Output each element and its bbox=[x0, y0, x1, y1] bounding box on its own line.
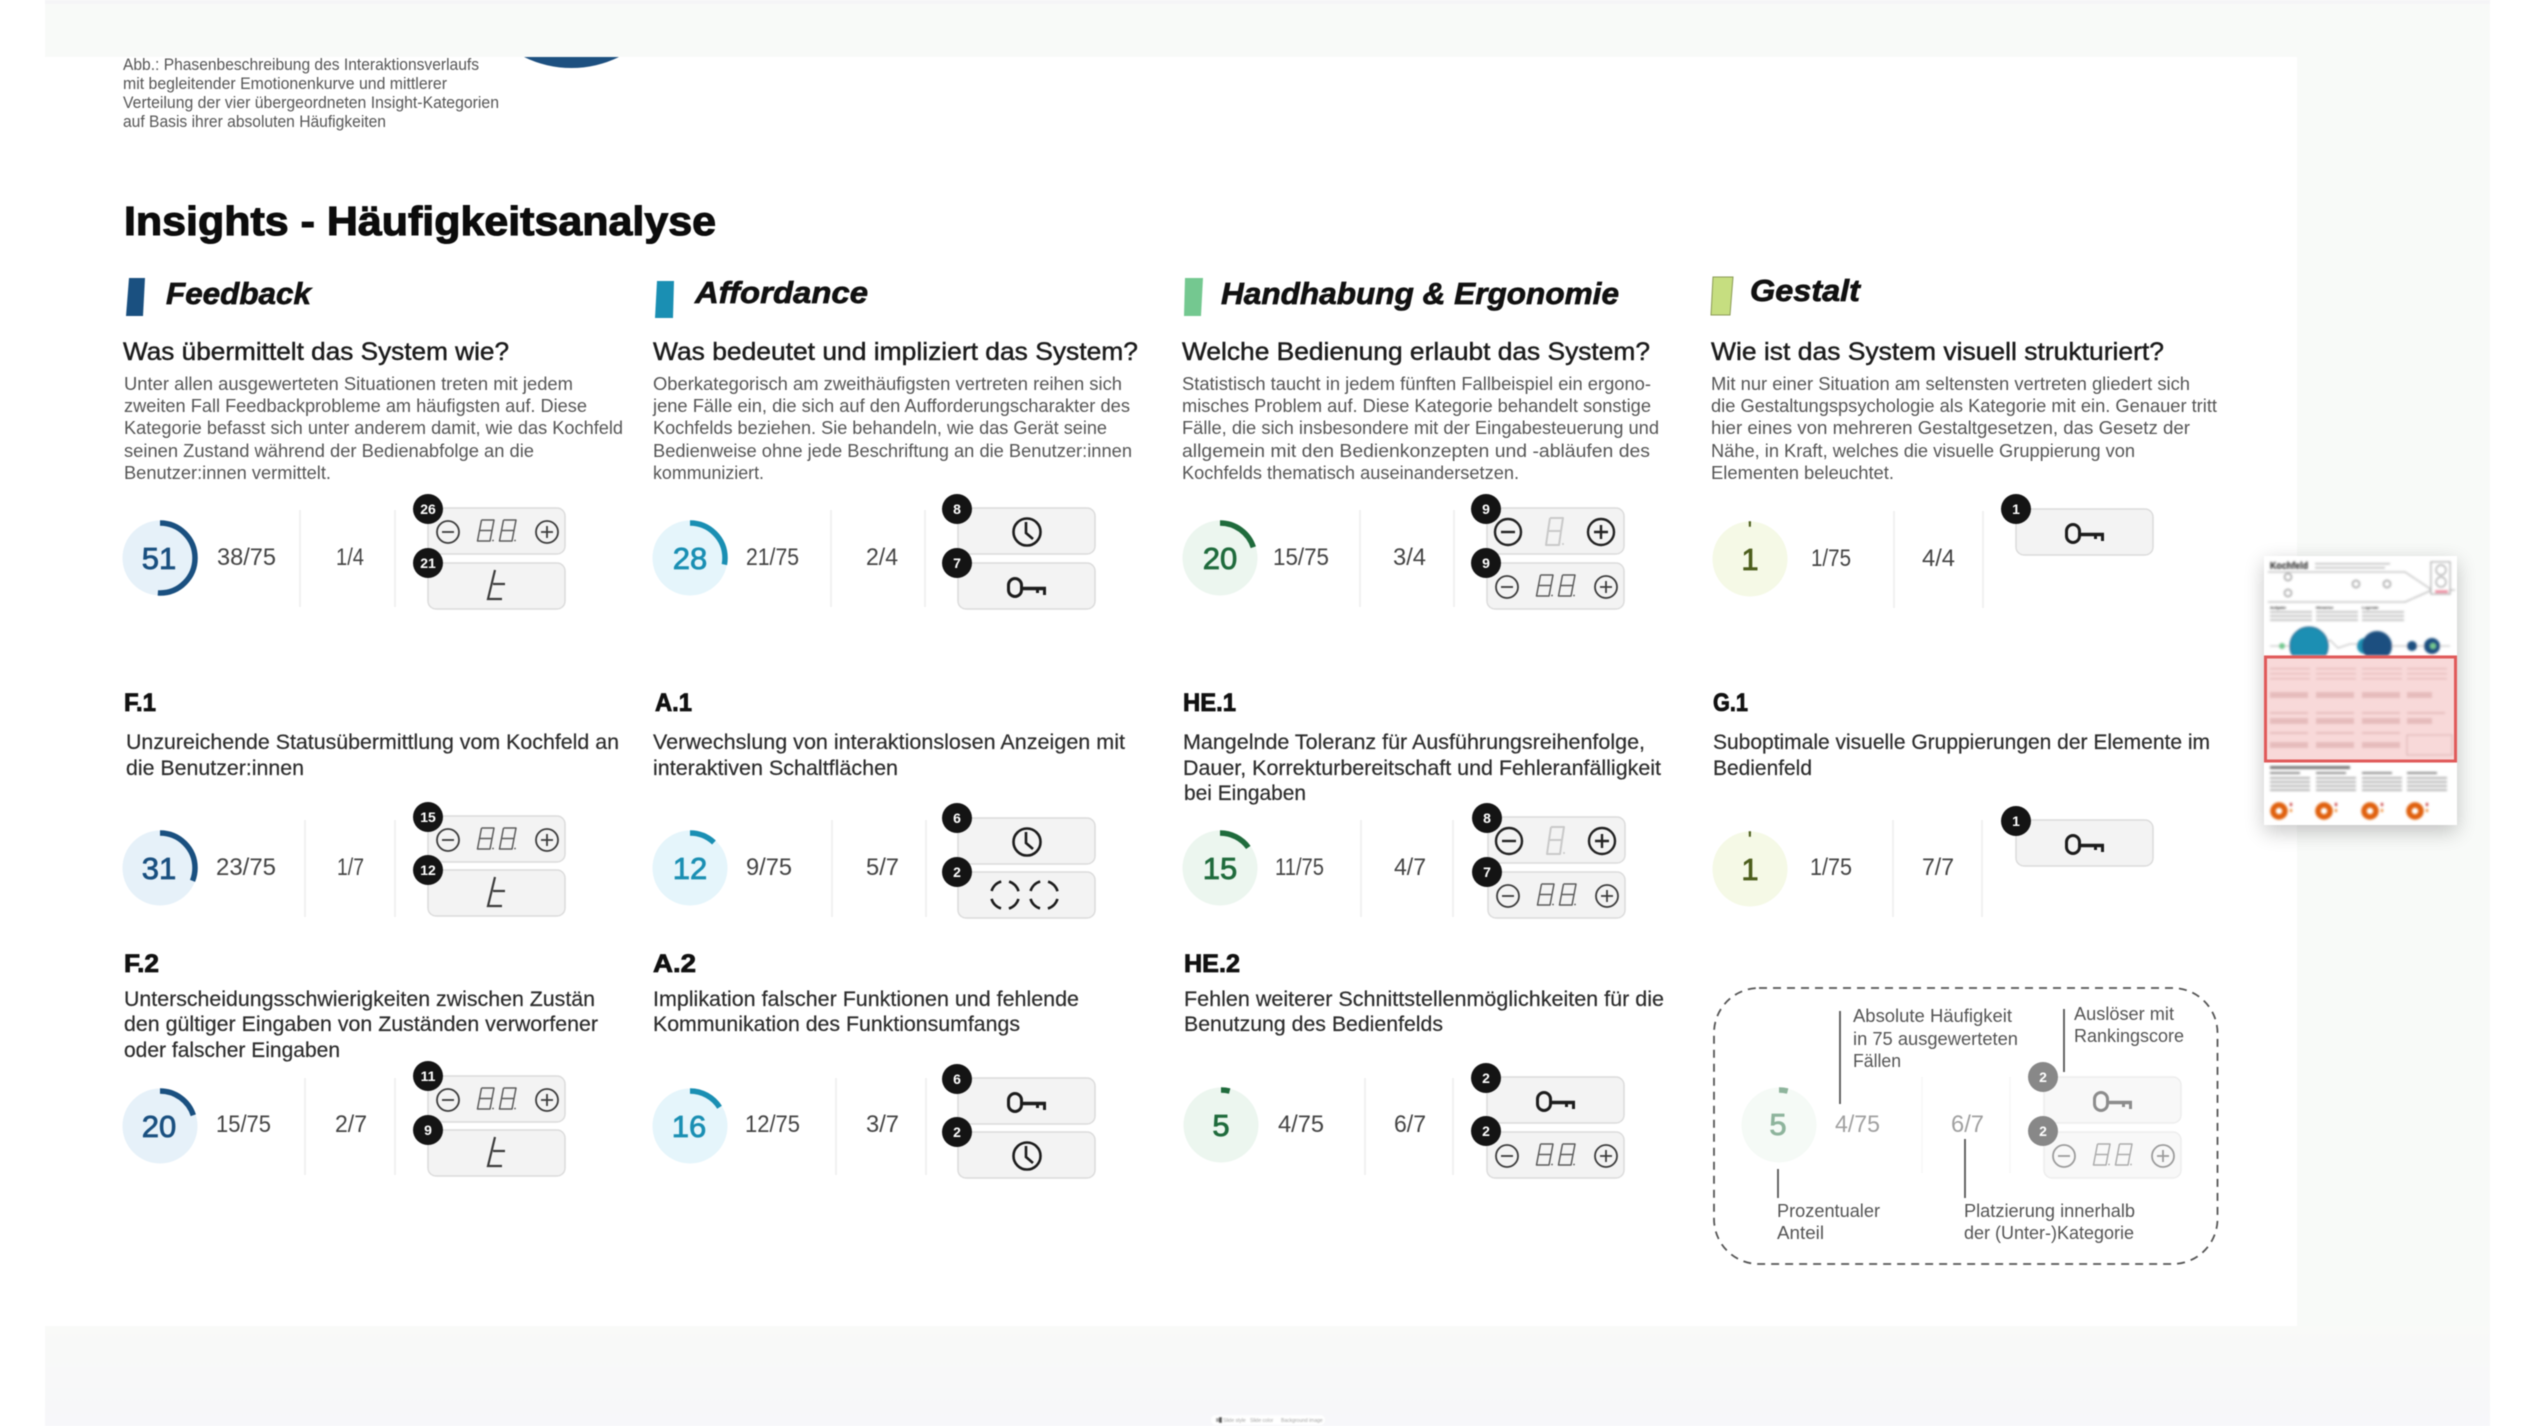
trigger: 1: 1 bbox=[2012, 813, 2020, 829]
count 1/75: 1/75 bbox=[1810, 854, 1852, 881]
figure caption: auf Basis ihrer absoluten Häufigkeiten bbox=[123, 113, 386, 131]
legend label: percentage bbox=[1777, 1200, 1880, 1243]
column: Affordance header bbox=[652, 275, 1138, 483]
text: Handhabung description: allgemein mit den Bedienkonzepten und -abläufen des bbox=[1182, 441, 1650, 461]
rank 6/7: 6/7 bbox=[1394, 1111, 1426, 1138]
text: Affordance description: kommuniziert. bbox=[653, 463, 764, 483]
poster thumbnail with highlighted region bbox=[2264, 556, 2457, 832]
count 15/75: 15/75 bbox=[216, 1111, 271, 1138]
legend label: absolute frequency: Absolute Häufigkeit bbox=[1853, 1005, 2012, 1026]
text: A.1 description bbox=[653, 730, 1125, 780]
triggers: 8 and 7: 7 bbox=[953, 555, 961, 571]
text: G.1 description: Suboptimale visuelle Gruppierungen der Elemente im bbox=[1713, 730, 2210, 754]
triggers: 6 and 2: 2 bbox=[953, 1124, 961, 1140]
donut: 15 percent: 15 bbox=[1203, 851, 1237, 886]
count 21/75: 21/75 bbox=[746, 544, 799, 571]
text: Handhabung description: Statistisch taucht in jedem fünften Fallbeispiel ein ergono- bbox=[1182, 374, 1651, 394]
legend sample row (faded): 6/7 bbox=[1951, 1111, 1984, 1138]
triggers: 9 and 9: 9 bbox=[1482, 501, 1490, 517]
triggers: 6 and 2: 6 bbox=[953, 810, 961, 826]
triggers: 9 and 9: 9 bbox=[1482, 555, 1490, 571]
legend label: trigger: Auslöser mit bbox=[2074, 1003, 2174, 1024]
count 12/75: 12/75 bbox=[745, 1111, 800, 1138]
insight F.1 bbox=[122, 689, 619, 917]
text: Feedback description: seinen Zustand während der Bedienabfolge an die bbox=[124, 441, 534, 461]
text: G.1 description bbox=[1713, 730, 2210, 780]
count 38/75: 38/75 bbox=[217, 544, 276, 571]
triggers: 8 and 7 bbox=[1472, 803, 1625, 918]
clipped blue circle from the section above bbox=[524, 57, 619, 68]
legend sample row (faded): 5 bbox=[1769, 1107, 1787, 1142]
text: F.1 description: die Benutzer:innen bbox=[126, 756, 304, 780]
bottom toolbar bbox=[1211, 1415, 1325, 1425]
heading: F.1: F.1 bbox=[124, 689, 156, 717]
text: Feedback description: Kategorie befasst sich unter anderem damit, wie das Kochfeld bbox=[124, 418, 623, 438]
donut: 20 percent: 20 bbox=[1203, 541, 1237, 576]
bottom toolbar: Slide style bbox=[1223, 1418, 1246, 1424]
rank 2/4: 2/4 bbox=[866, 544, 898, 571]
text: Gestalt description: Nähe, in Kraft, welches die visuelle Gruppierung von bbox=[1711, 441, 2135, 461]
triggers: 11 and 9: 9 bbox=[424, 1122, 432, 1138]
heading: Affordance: Affordance bbox=[694, 275, 868, 310]
donut: 51 percent bbox=[122, 520, 198, 596]
rank 3/4: 3/4 bbox=[1393, 544, 1426, 571]
donut: 31 percent bbox=[122, 830, 198, 906]
text: HE.1 description: bei Eingaben bbox=[1184, 781, 1306, 805]
stat row: Feedback total bbox=[122, 494, 565, 609]
count 9/75: 9/75 bbox=[746, 854, 792, 881]
count 4/75: 4/75 bbox=[1278, 1111, 1324, 1138]
text: Handhabung description: Kochfelds thematisch auseinandersetzen. bbox=[1182, 463, 1519, 483]
text: Handhabung description: misches Problem auf. Diese Kategorie behandelt sonstige bbox=[1182, 396, 1651, 416]
text: Feedback description: Unter allen ausgewerteten Situationen treten mit jedem bbox=[124, 374, 573, 394]
trigger: 1 bbox=[2001, 806, 2153, 866]
legend label: placement: der (Unter-)Kategorie bbox=[1964, 1222, 2134, 1243]
text: F.2 description: oder falscher Eingaben bbox=[124, 1038, 340, 1062]
triggers: 8 and 7: 8 bbox=[1483, 810, 1491, 826]
poster thumbnail with highlighted region: Aufgabe bbox=[2270, 605, 2287, 610]
legend sample row (faded) bbox=[1742, 1077, 2181, 1178]
triggers: 11 and 9 bbox=[413, 1061, 565, 1176]
triggers: 15 and 12 bbox=[413, 802, 565, 916]
legend label: percentage: Anteil bbox=[1777, 1222, 1824, 1243]
icon: affordance colour bar bbox=[655, 281, 674, 318]
title: Insights - Häufigkeitsanalyse bbox=[124, 198, 716, 244]
donut: 5 percent: 5 bbox=[1212, 1108, 1230, 1143]
trigger: 1 bbox=[2001, 494, 2153, 555]
text: Gestalt description bbox=[1711, 374, 2217, 483]
donut: 1 percent: 1 bbox=[1741, 542, 1759, 577]
legend grey badges bbox=[2028, 1062, 2058, 1146]
text: HE.1 description bbox=[1183, 730, 1661, 805]
triggers: 9 and 9 bbox=[1471, 494, 1624, 609]
stat row: Gestalt total bbox=[1712, 494, 2153, 608]
question: Feedback: Was übermittelt das System wie? bbox=[123, 338, 509, 366]
triggers: 2 and 2: 2 bbox=[1482, 1123, 1490, 1139]
text: A.1 description: Verwechslung von interaktionslosen Anzeigen mit bbox=[653, 730, 1125, 754]
text: A.2 description bbox=[653, 987, 1079, 1036]
heading: G.1: G.1 bbox=[1713, 689, 1748, 717]
text: HE.2 description bbox=[1184, 987, 1664, 1036]
bottom toolbar: Slide color bbox=[1250, 1418, 1274, 1424]
triggers: 6 and 2 bbox=[942, 1064, 1095, 1178]
count 1/75: 1/75 bbox=[1811, 545, 1851, 572]
text: Affordance description: jene Fälle ein, die sich auf den Aufforderungscharakter des bbox=[652, 396, 1130, 416]
bottom toolbar: Background image bbox=[1281, 1418, 1323, 1424]
heading: Handhabung und Ergonomie: Handhabung & Ergonomie bbox=[1221, 276, 1619, 311]
legend label: absolute frequency: Fällen bbox=[1853, 1050, 1901, 1071]
figure caption: mit begleitender Emotionenkurve und mittlerer bbox=[123, 75, 447, 93]
text: Affordance description: Bedienweise ohne jede Beschriftung an die Benutzer:innen bbox=[653, 441, 1132, 461]
count 15/75: 15/75 bbox=[1273, 544, 1329, 571]
triggers: 11 and 9: 11 bbox=[421, 1068, 436, 1084]
rank 3/7: 3/7 bbox=[866, 1111, 899, 1138]
legend label: trigger: Rankingscore bbox=[2074, 1025, 2184, 1046]
rank 7/7: 7/7 bbox=[1922, 854, 1954, 881]
triggers: 26 and 21 bbox=[413, 494, 565, 609]
donut: 16 percent bbox=[652, 1088, 728, 1164]
triggers: 2 and 2: 2 bbox=[1482, 1070, 1490, 1086]
triggers: 6 and 2 bbox=[942, 803, 1095, 918]
triggers: 6 and 2: 6 bbox=[953, 1071, 961, 1087]
donut: 16 percent: 16 bbox=[672, 1109, 706, 1144]
text: Gestalt description: hier eines von mehreren Gestaltgesetzen, das Gesetz der bbox=[1711, 418, 2190, 438]
text: A.2 description: Kommunikation des Funktionsumfangs bbox=[653, 1012, 1020, 1036]
rank 5/7: 5/7 bbox=[866, 854, 899, 881]
donut: 28 percent bbox=[652, 520, 728, 596]
triggers: 15 and 12: 15 bbox=[420, 809, 436, 825]
legend label: placement: Platzierung innerhalb bbox=[1964, 1200, 2135, 1221]
text: Feedback description: Benutzer:innen vermittelt. bbox=[124, 463, 331, 483]
heading: HE.1: HE.1 bbox=[1183, 689, 1236, 717]
question: Affordance: Was bedeutet und impliziert das System? bbox=[653, 338, 1138, 366]
legend label: trigger bbox=[2074, 1003, 2184, 1046]
figure caption: Abb.: Phasenbeschreibung des Interaktionsverlaufs bbox=[123, 56, 479, 74]
text: HE.1 description: Mangelnde Toleranz für Ausführungsreihenfolge, bbox=[1183, 730, 1645, 754]
legend label: placement bbox=[1964, 1200, 2135, 1243]
rank 1/7: 1/7 bbox=[337, 854, 364, 881]
text: Handhabung description: Fälle, die sich insbesondere mit der Eingabesteuerung und bbox=[1182, 418, 1659, 438]
insight HE.2 bbox=[1184, 950, 1664, 1178]
question: Handhabung: Welche Bedienung erlaubt das System? bbox=[1182, 338, 1650, 366]
heading: HE.2: HE.2 bbox=[1184, 950, 1240, 978]
legend grey badges: 2 bbox=[2039, 1069, 2047, 1085]
heading: F.2: F.2 bbox=[124, 950, 159, 978]
donut: 1 percent bbox=[1712, 522, 1788, 596]
text: Affordance description: Oberkategorisch am zweithäufigsten vertreten reihen sich bbox=[653, 374, 1122, 394]
rank 4/7: 4/7 bbox=[1394, 854, 1426, 881]
triggers: 26 and 21: 26 bbox=[420, 501, 436, 517]
heading: A.2: A.2 bbox=[653, 950, 696, 978]
legend grey badges: 2 bbox=[2039, 1123, 2047, 1139]
donut: 15 percent bbox=[1182, 830, 1258, 906]
icon: gestalt colour bar bbox=[1711, 277, 1733, 315]
text: F.2 description: Unterscheidungsschwierigkeiten zwischen Zustän bbox=[124, 987, 595, 1011]
count 11/75: 11/75 bbox=[1275, 854, 1324, 881]
text: Feedback description: zweiten Fall Feedbackprobleme am häufigsten auf. Diese bbox=[124, 396, 587, 416]
text: HE.1 description: Dauer, Korrekturbereitschaft und Fehleranfälligkeit bbox=[1183, 756, 1661, 780]
text: G.1 description: Bedienfeld bbox=[1713, 756, 1812, 780]
triggers: 2 and 2 bbox=[1471, 1063, 1624, 1178]
donut: 1 percent bbox=[1712, 832, 1788, 906]
column: Gestalt header bbox=[1711, 273, 2217, 483]
donut: 20 percent bbox=[1182, 520, 1258, 596]
donut: 51 percent: 51 bbox=[142, 541, 176, 576]
legend label: absolute frequency: in 75 ausgewerteten bbox=[1853, 1028, 2018, 1049]
legend panel bbox=[1714, 988, 2218, 1264]
text: HE.2 description: Benutzung des Bedienfelds bbox=[1184, 1012, 1443, 1036]
donut: 20 percent bbox=[122, 1088, 198, 1164]
legend label: absolute frequency bbox=[1853, 1005, 2018, 1071]
figure caption bbox=[123, 56, 499, 131]
rank 1/4: 1/4 bbox=[336, 544, 364, 571]
triggers: 15 and 12: 12 bbox=[420, 862, 436, 878]
legend sample row (faded): 4/75 bbox=[1835, 1111, 1880, 1138]
rank 2/7: 2/7 bbox=[335, 1111, 367, 1138]
rank 4/4: 4/4 bbox=[1922, 545, 1955, 572]
triggers: 8 and 7: 7 bbox=[1483, 864, 1491, 880]
text: A.2 description: Implikation falscher Funktionen und fehlende bbox=[653, 987, 1079, 1011]
column: Handhabung und Ergonomie header bbox=[1182, 276, 1659, 483]
donut: 12 percent: 12 bbox=[673, 851, 707, 886]
text: F.2 description bbox=[124, 987, 598, 1062]
poster thumbnail with highlighted region: Hinweise bbox=[2316, 605, 2334, 610]
heading: Feedback: Feedback bbox=[166, 276, 313, 311]
donut: 1 percent: 1 bbox=[1741, 852, 1759, 887]
text: F.2 description: den gültiger Eingaben von Zuständen verworfener bbox=[124, 1012, 598, 1036]
triggers: 6 and 2: 2 bbox=[953, 864, 961, 880]
text: HE.2 description: Fehlen weiterer Schnittstellenmöglichkeiten für die bbox=[1184, 987, 1664, 1011]
text: F.1 description bbox=[126, 730, 619, 780]
text: Affordance description: Kochfelds beziehen. Sie behandeln, wie das Gerät seine bbox=[653, 418, 1107, 438]
donut: 5 percent bbox=[1184, 1088, 1258, 1162]
trigger: 1: 1 bbox=[2012, 501, 2020, 517]
text: Feedback description bbox=[124, 374, 623, 483]
insight A.2 bbox=[652, 950, 1095, 1178]
column: Feedback header bbox=[123, 276, 623, 483]
text: Handhabung description bbox=[1182, 374, 1659, 483]
count 23/75: 23/75 bbox=[216, 854, 276, 881]
text: Gestalt description: Mit nur einer Situation am seltensten vertreten gliedert sich bbox=[1711, 374, 2190, 394]
figure caption: Verteilung der vier übergeordneten Insight-Kategorien bbox=[123, 94, 499, 112]
poster thumbnail with highlighted region: Kochfeld bbox=[2270, 561, 2308, 572]
heading: A.1: A.1 bbox=[655, 689, 692, 717]
insight A.1 bbox=[652, 689, 1125, 918]
text: Gestalt description: die Gestaltungspsychologie als Kategorie mit ein. Genauer tritt bbox=[1711, 396, 2217, 416]
icon: handhabung colour bar bbox=[1184, 278, 1203, 316]
donut: 28 percent: 28 bbox=[673, 541, 707, 576]
heading: Gestalt: Gestalt bbox=[1750, 273, 1862, 308]
donut: 12 percent bbox=[652, 830, 728, 906]
legend label: percentage: Prozentualer bbox=[1777, 1200, 1880, 1221]
text: A.1 description: interaktiven Schaltflächen bbox=[653, 756, 898, 780]
insight G.1 bbox=[1712, 689, 2210, 917]
donut: 31 percent: 31 bbox=[142, 851, 176, 886]
donut: 20 percent: 20 bbox=[142, 1109, 176, 1144]
text: F.1 description: Unzureichende Statusübermittlung vom Kochfeld an bbox=[126, 730, 619, 754]
stat row: Affordance total bbox=[652, 494, 1095, 609]
triggers: 26 and 21: 21 bbox=[420, 555, 436, 571]
icon: feedback colour bar bbox=[126, 278, 145, 316]
stat row: Handhabung total bbox=[1182, 494, 1624, 609]
text: Gestalt description: Elementen beleuchtet. bbox=[1711, 463, 1894, 483]
poster thumbnail with highlighted region: Legende bbox=[2362, 605, 2379, 610]
question: Gestalt: Wie ist das System visuell strukturiert? bbox=[1711, 338, 2164, 366]
insight HE.1 bbox=[1182, 689, 1661, 918]
insight F.2 bbox=[122, 950, 598, 1176]
text: Affordance description bbox=[652, 374, 1132, 483]
triggers: 8 and 7 bbox=[942, 494, 1095, 609]
triggers: 8 and 7: 8 bbox=[953, 501, 961, 517]
